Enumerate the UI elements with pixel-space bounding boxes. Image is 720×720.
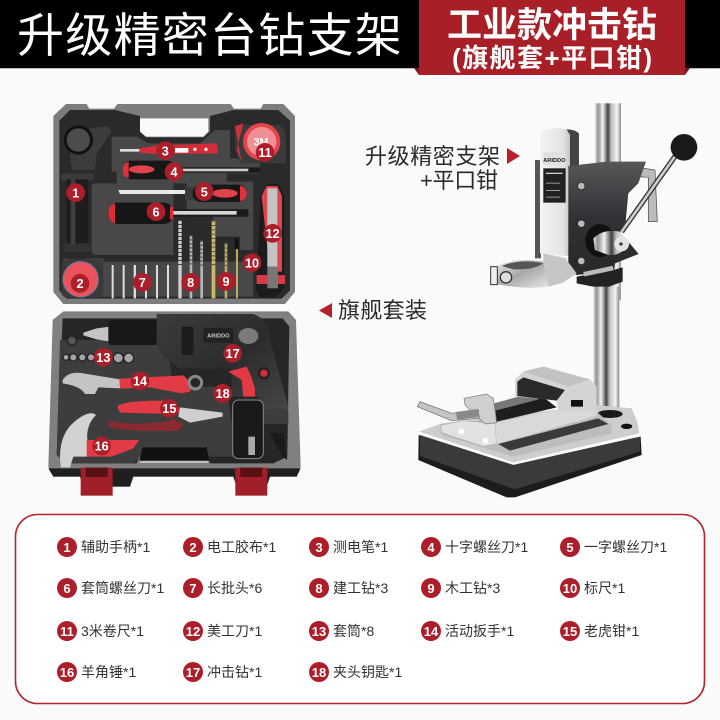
badge 3 [156,141,175,160]
item 7 [183,578,262,598]
badge 8 [181,273,200,292]
item 3: 测电笔*1 [333,539,388,555]
badge 17: 17 [226,347,240,361]
column foot [597,410,623,418]
item 18: 18 [312,665,326,680]
item 5: 5 [566,540,574,555]
item 15 [560,621,639,641]
pliers [108,401,223,432]
drill stand lower [417,287,642,497]
panel: parts list [16,514,704,704]
badge 4: 4 [170,165,178,179]
back lever arm [638,167,657,222]
case interior [59,110,290,299]
item 3 [309,537,388,557]
bit holder [233,400,263,459]
badge 5: 5 [201,185,208,199]
icon: insulation tape [62,259,103,298]
item 2: 电工胶布*1 [207,539,276,555]
vise holes [458,428,488,444]
item 3: 3 [315,540,323,555]
badge 1: 1 [72,186,79,200]
badge 12 [263,224,282,243]
item 2 [183,537,276,557]
item 12: 美工刀*1 [207,623,262,639]
badge 18: 18 [216,387,230,401]
red tab: product edition: 工业款冲击钻 [447,6,657,45]
item 18: 夹头钥匙*1 [333,664,402,680]
jaw notch [571,400,583,407]
item 4: 4 [427,540,435,555]
icon: test pencil [120,143,218,154]
badge 9 [217,272,235,291]
nameplate: ARIDDO [543,158,566,164]
vise side [441,421,497,447]
badge 15: 15 [162,402,176,416]
icon: wood drill bits [212,221,238,298]
item 11: 11 [60,624,74,639]
column [595,103,621,300]
icon: tape measure: 3M [254,136,268,148]
icon: masonry drill bits [178,220,203,298]
badge 10: 10 [245,256,259,270]
feed lever [622,134,697,232]
case shell [53,104,295,304]
badge 16 [92,437,111,455]
claw hammer [60,413,139,467]
badge 7: 7 [139,276,146,290]
item 10: 10 [563,581,577,596]
item 9 [421,578,500,598]
carry handle opening [140,118,208,137]
pinion hub [585,224,630,257]
item 14: 活动扳手*1 [445,623,514,639]
item 6: 套筒螺丝刀*1 [81,580,164,596]
badge 2 [71,274,89,293]
item 16: 16 [60,665,74,680]
item 11: 3米卷尺*1 [81,623,144,639]
latch right [235,468,267,496]
moving jaw [515,367,597,411]
item 5 [560,537,667,557]
title: 升级精密台钻支架 [17,9,403,62]
icon: flat screwdriver [118,185,247,202]
item 1: 1 [63,540,71,555]
item 6 [57,578,164,598]
item 8 [309,578,388,598]
nameplate [535,128,579,258]
badge 17 [223,344,242,363]
item 8: 8 [315,581,323,596]
vise handle [417,402,479,421]
item 14: 14 [424,624,439,639]
red tab: product edition: (旗舰套+平口钳) [452,43,652,73]
adjustable wrench [63,373,202,394]
vise slots [498,418,608,451]
item 1: 辅助手柄*1 [81,539,150,555]
item 17 [183,662,262,682]
header band [0,0,720,69]
callout: flagship kit: 旗舰套装 [338,298,427,323]
icon: utility knife [256,184,285,297]
item 8: 建工钻*3 [333,580,388,596]
badge 14 [131,372,149,390]
screw nut [464,394,497,424]
callout: upgraded stand plus pliers: +平口钳 [420,168,498,193]
badge 13 [94,348,113,367]
item 4 [421,537,528,557]
jaw top [523,367,590,387]
item 13: 套筒*8 [333,623,374,639]
item 7: 长批头*6 [207,580,262,596]
drill stand upper [491,103,697,300]
item 14 [421,621,514,641]
item 2: 2 [189,540,197,555]
item 16 [57,662,136,682]
badge 2: 2 [76,277,84,291]
item 15: 老虎钳*1 [584,623,639,639]
badge 12: 12 [266,227,280,241]
bolts [578,182,585,265]
tool case: upper tray [53,104,295,304]
item 10: 标尺*1 [584,580,625,596]
icon: socket screwdriver [108,203,248,224]
badge 3: 3 [162,144,169,158]
base top plate [419,405,639,462]
latch left [81,468,113,496]
vise bed [495,405,597,444]
item 17: 17 [186,665,200,680]
item 16: 羊角锤*1 [81,664,136,680]
icon: long bits [112,265,169,298]
impact drill: ARIDDO [207,333,230,339]
handle opening [139,447,209,461]
impact drill [83,314,288,460]
badge 6 [147,202,165,221]
callout: upgraded stand plus pliers: 升级精密支架 [365,144,500,169]
badge 18 [213,384,232,403]
item 4: 十字螺丝刀*1 [445,539,528,555]
item 7: 7 [189,581,197,596]
base side highlight [420,435,640,489]
badge 7 [133,273,152,292]
badge 9: 9 [222,275,230,289]
item 18 [309,662,402,682]
badge 6: 6 [152,205,160,219]
item 17: 冲击钻*1 [207,664,262,680]
item 9: 9 [427,581,435,596]
callout: upgraded stand plus pliers [365,144,520,193]
icon: auxiliary handle [61,125,112,259]
badge 13: 13 [96,351,110,365]
item 13: 13 [312,624,326,639]
badge 11: 11 [258,146,272,160]
base bolt hole [621,424,632,429]
drill clamp collar [491,253,577,288]
icon: tape measure [235,123,286,163]
item 15: 15 [563,624,577,639]
tool case: lower tray [48,311,301,496]
badge 4 [165,162,183,181]
icon: phillips screwdriver [123,161,260,179]
badge 10 [243,253,261,272]
head casting [568,162,646,277]
item 11 [57,621,144,641]
base lip [48,468,301,487]
badge 1 [66,183,85,202]
badge 15 [160,399,179,418]
moulded tray [57,340,237,463]
lead screw [494,392,539,411]
case interior [57,318,289,463]
item 13 [309,621,374,641]
badge 14: 14 [133,375,147,389]
item 12: 12 [186,624,200,639]
item 1 [57,537,150,557]
badge 11 [256,143,274,162]
badge 8: 8 [187,276,194,290]
badge 5 [195,182,214,201]
lower bracket [577,267,623,289]
sockets [63,336,134,363]
case shell [48,311,301,487]
item 10 [560,578,625,598]
bed channel [495,393,557,422]
item 5: 一字螺丝刀*1 [584,539,667,555]
vise base slab [441,412,612,457]
base side [418,435,642,497]
item 6: 6 [63,581,71,596]
jaw dark face [517,377,565,401]
red tab: product edition [414,0,690,75]
badge 16: 16 [95,440,109,454]
tray moulding [63,130,260,297]
item 9: 木工钻*3 [445,580,500,596]
item 12 [183,621,262,641]
column lower [593,287,619,415]
icon: ruler [235,238,239,249]
